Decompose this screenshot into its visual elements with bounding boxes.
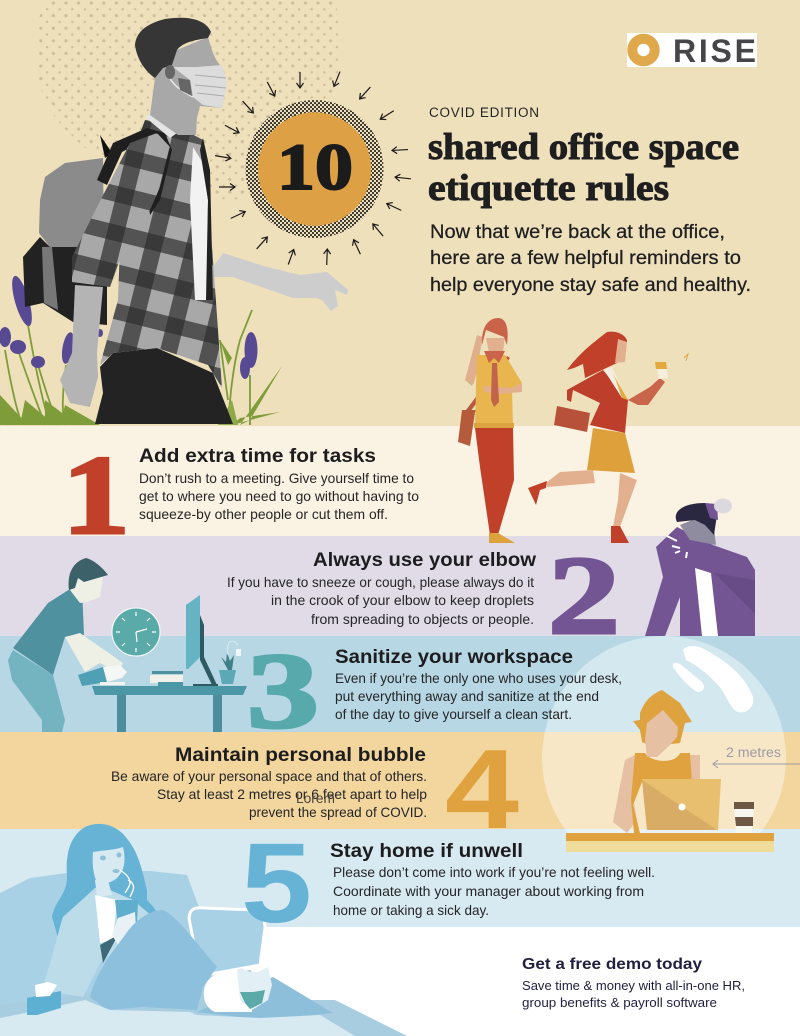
panel: hero background (0, 0, 800, 426)
number 4: 4 (445, 726, 519, 852)
illustration: man sneezing into elbow (645, 498, 755, 636)
logo: RISE: RISE (673, 33, 756, 69)
label: 2 metres distance (713, 745, 800, 768)
body (227, 575, 534, 627)
robe (42, 888, 153, 997)
hair (52, 824, 157, 960)
sleeve (72, 133, 170, 287)
body: get to where you need to go without having to (139, 489, 419, 504)
body (333, 865, 655, 918)
heading: Sanitize your workspace (335, 646, 573, 668)
sofa (0, 871, 200, 1010)
heading: Add extra time for tasks (139, 445, 376, 467)
rule 4 text (111, 726, 519, 852)
body: from spreading to objects or people. (311, 612, 534, 627)
call to action: Save time & money with all-in-one HR, (522, 979, 745, 993)
body (335, 671, 622, 722)
mask (173, 65, 227, 108)
body: home or taking a sick day. (333, 903, 489, 918)
illustration: man walking with mask and backpack (23, 18, 348, 424)
rule 1 text (62, 433, 419, 558)
top (631, 753, 692, 833)
body: Stay at least 2 metres or 6 feet apart to help (157, 787, 427, 802)
lower blanket (0, 1000, 355, 1036)
clock (112, 608, 160, 656)
coffee cup (734, 802, 754, 833)
backpack (23, 135, 112, 325)
panel: rule 1 band (0, 426, 800, 536)
bubble highlights (673, 646, 753, 712)
jeans (95, 348, 233, 424)
rule 2 text (227, 534, 620, 658)
strap (97, 128, 172, 215)
arms (613, 755, 700, 833)
intro paragraph: help everyone stay safe and healthy. (430, 275, 751, 296)
far arm (213, 253, 348, 311)
illustration: woman with red hair running with coffee (528, 332, 688, 543)
heading: shared office space (428, 127, 739, 168)
bubble (542, 636, 786, 833)
number 3: 3 (247, 632, 319, 751)
body: in the crook of your elbow to keep droplets (271, 593, 534, 608)
cat (204, 967, 272, 1012)
panel: rule 3 band (0, 636, 800, 732)
body: squeeze-by other people or cut them off. (139, 507, 388, 522)
body (139, 471, 419, 522)
call to action: Get a free demo today (522, 956, 702, 973)
halftone dot circle behind man (35, 0, 340, 205)
call to action: group benefits & payroll software (522, 996, 717, 1010)
panel: rule 5 band (0, 829, 800, 927)
panel: rule 4 band (0, 732, 800, 829)
body: Coordinate with your manager about working from (333, 884, 644, 899)
icon: number 10 badge with arrows (215, 70, 411, 266)
heading: Maintain personal bubble (175, 744, 426, 766)
label: 2 metres distance: 2 metres (726, 745, 781, 760)
big number 10: 10 (277, 131, 353, 204)
tissue box (27, 991, 61, 1015)
illustration: woman at laptop in personal bubble (542, 636, 786, 852)
table (566, 833, 774, 841)
mug and hand (115, 900, 138, 925)
body: prevent the spread of COVID. (249, 805, 427, 820)
title block (428, 105, 751, 296)
person (8, 650, 65, 732)
desk (92, 671, 247, 732)
body: Even if you’re the only one who uses your desk, (335, 671, 622, 686)
arrows pointing at badge (215, 70, 411, 266)
shirt (95, 895, 117, 943)
number 5: 5 (241, 820, 312, 946)
body: of the day to give yourself a clean start. (335, 707, 572, 722)
collar (145, 112, 177, 138)
stray placeholder word: Lorem (296, 791, 335, 806)
blanket (90, 910, 217, 1010)
shirt (100, 120, 222, 388)
intro paragraph: here are a few helpful reminders to (430, 248, 741, 269)
face (93, 847, 125, 884)
heading: etiquette rules (428, 168, 669, 209)
plant (219, 641, 241, 684)
heading (428, 127, 739, 209)
hair (633, 690, 692, 747)
laptop (642, 779, 721, 830)
heading: Always use your elbow (313, 549, 537, 571)
illustration: man in yellow shirt checking watch (458, 318, 522, 543)
bed (0, 970, 407, 1036)
heading: Stay home if unwell (330, 840, 523, 862)
intro paragraph (430, 222, 751, 296)
body: Don’t rush to a meeting. Give yourself time to (139, 471, 414, 486)
pillow (189, 908, 265, 976)
hair (135, 18, 211, 78)
body: put everything away and sanitize at the end (335, 689, 599, 704)
face (645, 710, 678, 757)
intro paragraph: Now that we’re back at the office, (430, 222, 725, 243)
body: Be aware of your personal space and that of others. (111, 769, 427, 784)
panel: rule 2 band (0, 536, 800, 636)
logo: RISE (627, 33, 757, 69)
spray bottle (78, 667, 107, 686)
face (150, 37, 226, 135)
rule 3 text (247, 632, 622, 751)
neck (155, 88, 195, 135)
body (111, 769, 427, 820)
body: Please don’t come into work if you’re not feeling well. (333, 865, 655, 880)
number 2: 2 (548, 534, 620, 658)
number 1: 1 (62, 433, 130, 558)
monitor (186, 595, 218, 686)
illustration: man sanitizing desk (8, 558, 247, 732)
rule 5 text (241, 820, 655, 946)
kicker: COVID EDITION (429, 105, 539, 120)
illustration: lavender and grass (0, 274, 282, 425)
forearm and hand (60, 285, 103, 407)
call to action (522, 956, 745, 1010)
illustration: sick woman under blanket with cat (0, 824, 407, 1036)
undershirt (190, 147, 208, 300)
body: If you have to sneeze or cough, please always do it (227, 575, 534, 590)
